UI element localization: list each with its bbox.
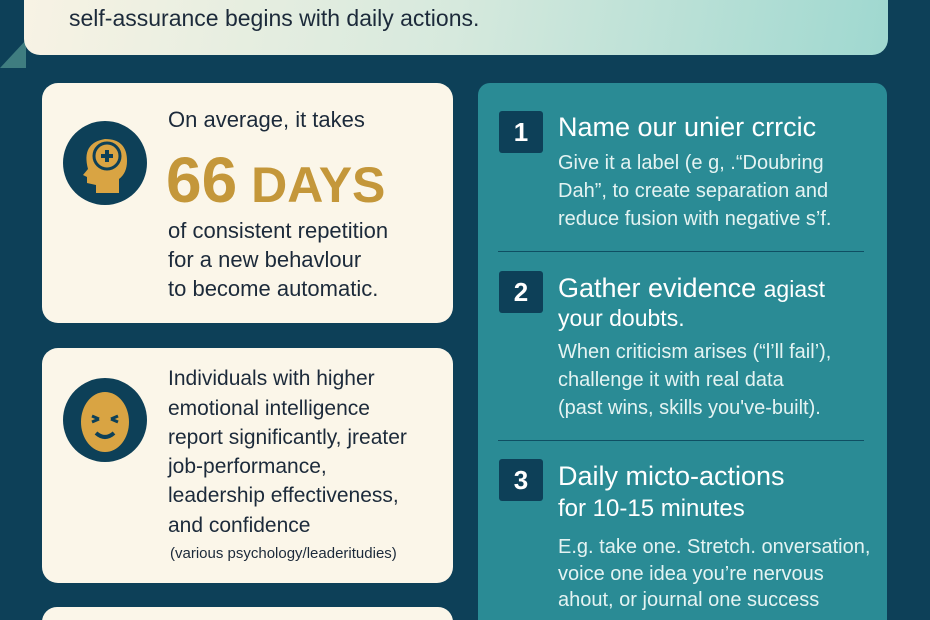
steps list: reduce fusion with negative s’f. — [558, 208, 832, 230]
steps list: E.g. take one. Stretch. onversation, — [558, 536, 870, 558]
steps list: Daily micto-actions — [558, 461, 785, 491]
steps list: Dah”, to create separation and — [558, 180, 828, 202]
steps list: challenge it with real data — [558, 369, 784, 391]
panel: emotional intelligence card: leadership effectiveness, — [168, 484, 399, 507]
steps list: voice one idea you’re nervous — [558, 563, 824, 585]
panel: 66 days card — [42, 83, 453, 323]
stat text: Individuals with higher — [168, 367, 375, 390]
steps list: 2 — [514, 277, 528, 307]
panel: emotional intelligence card: emotional intelligence — [168, 397, 370, 420]
panel: 66 days card: to become automatic. — [168, 276, 378, 301]
steps list: 3 — [514, 465, 528, 495]
panel: emotional intelligence card: (various psychology/leaderitudies) — [170, 545, 397, 562]
panel: emotional intelligence card: and confidence — [168, 514, 310, 537]
icon: smiling face — [63, 378, 147, 462]
steps list: Give it a label (e g, .“Doubring — [558, 152, 824, 174]
panel: 66 days card: for a new behavlour — [168, 247, 361, 272]
decorative triangle — [0, 40, 26, 68]
panel: 66 days card: of consistent repetition — [168, 218, 388, 243]
panel: emotional intelligence card: report significantly, jreater — [168, 426, 407, 449]
panel: 66 days card: 66 DAYS — [166, 144, 385, 216]
panel: emotional intelligence card: job-performance, — [168, 455, 327, 478]
top banner — [24, 0, 888, 55]
steps list: ahout, or journal one success — [558, 589, 819, 611]
banner text: self-assurance begins with daily actions. — [69, 5, 479, 31]
steps list: for 10-15 minutes — [558, 495, 745, 522]
steps list: your doubts. — [558, 305, 685, 331]
panel: emotional intelligence card — [42, 348, 453, 583]
steps list: Name our unier crrcic — [558, 112, 816, 142]
panel: steps — [478, 83, 887, 620]
steps list: When criticism arises (“l’ll fail’), — [558, 341, 831, 363]
steps list: (past wins, skills you've-built). — [558, 397, 821, 419]
steps list: 1 — [514, 117, 528, 147]
panel: third card partial — [42, 607, 453, 620]
stat text: On average, it takes — [168, 107, 365, 132]
icon: head — [63, 121, 147, 205]
steps list: Gather evidence agiast — [558, 273, 825, 303]
